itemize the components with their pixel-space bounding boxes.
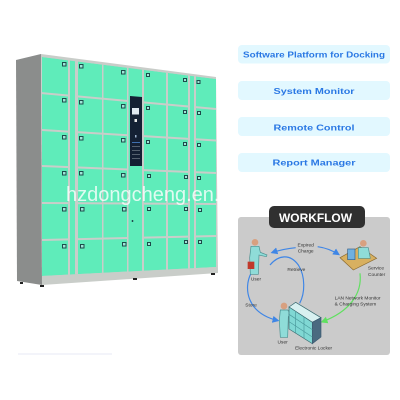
labels: Service — [368, 266, 384, 272]
button: software platform: Software Platform for Docking — [243, 50, 385, 60]
workflow heading — [269, 206, 365, 228]
button: software platform — [238, 45, 390, 64]
labels: Retrieve — [287, 267, 306, 273]
button: remote control: Remote Control — [274, 122, 354, 132]
labels: LAN Network Monitor — [335, 295, 381, 301]
user figure top — [248, 239, 267, 274]
workflow diagram — [245, 239, 386, 351]
labels: Electronic Locker — [295, 345, 333, 351]
locker cabinet — [16, 54, 218, 287]
cabinet front frame — [41, 54, 218, 285]
labels: & Charging System — [335, 302, 376, 308]
labels: Store — [245, 302, 257, 308]
door locks — [62, 62, 202, 248]
workflow heading: WORKFLOW — [279, 211, 353, 225]
button: remote control — [238, 117, 390, 136]
labels — [245, 242, 386, 351]
labels: Charge — [298, 249, 314, 255]
electronic locker — [289, 302, 321, 344]
central control panel — [130, 96, 142, 166]
locker doors — [41, 56, 216, 278]
labels: User — [251, 276, 261, 282]
cabinet feet — [20, 273, 215, 287]
arrows — [248, 247, 360, 322]
workflow panel — [238, 206, 390, 355]
user at locker — [279, 303, 294, 337]
cabinet side panel — [16, 54, 42, 285]
button: system monitor — [238, 81, 390, 100]
labels: Expired — [297, 242, 314, 248]
center door keyhole — [132, 220, 133, 222]
service counter — [340, 240, 377, 270]
watermark: hzdongcheng.en.alibaba.com — [66, 184, 327, 206]
workflow background — [238, 217, 390, 355]
labels: Counter — [368, 272, 386, 278]
button: report manager — [238, 153, 390, 172]
button: report manager: Report Manager — [272, 158, 356, 168]
labels: User — [278, 340, 288, 346]
button: system monitor: System Monitor — [274, 86, 355, 96]
